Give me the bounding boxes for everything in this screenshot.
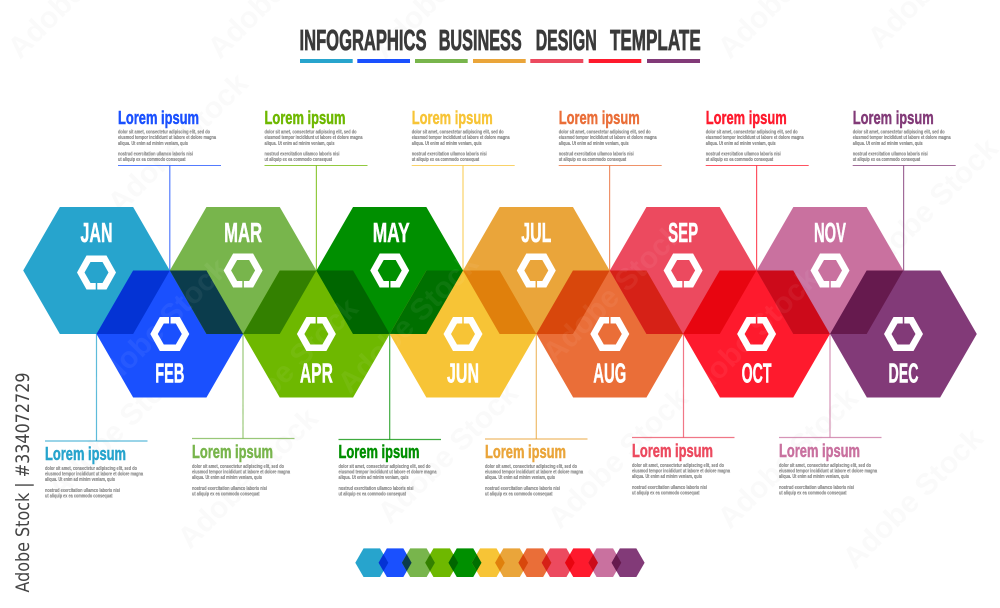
hexagon: JUL: JUL — [521, 217, 551, 248]
text block: JAN: Lorem ipsum — [45, 444, 126, 464]
text block: AUG: ut aliquip ex ea commodo consequat — [559, 157, 626, 163]
title: DESIGN — [536, 25, 597, 57]
text block: FEB — [118, 108, 221, 166]
hexagon: FEB — [96, 270, 243, 398]
connector: APR — [315, 166, 317, 270]
text: Adobe Stock — [82, 252, 235, 405]
text block: SEP: eiusmod tempor incididunt ut labore et dolore magna — [632, 468, 731, 474]
text block: AUG: nostrud exercitation ullamco laboris nisi — [559, 152, 634, 158]
text block: MAR: Lorem ipsum — [192, 442, 273, 462]
text block: SEP: Lorem ipsum — [632, 441, 713, 461]
title: INFOGRAPHICS — [300, 25, 426, 57]
text block: SEP: ut aliquip ex ea commodo consequat — [632, 490, 700, 496]
text block: AUG: dolor sit amet, consectetur adipiscing elit, sed do — [559, 130, 651, 136]
hexagon: JAN: JAN — [80, 217, 112, 248]
text: Adobe Stock — [672, 262, 825, 415]
text block: NOV: aliqua. Ut enim ad minim veniam, quis — [779, 474, 849, 480]
text block: JAN: eiusmod tempor incididunt ut labore et dolore magna — [45, 472, 144, 478]
connector: JUN — [462, 166, 464, 270]
text block: OCT: nostrud exercitation ullamco laboris nisi — [706, 152, 781, 158]
text: Adobe Stock — [837, 422, 990, 575]
text block: OCT: eiusmod tempor incididunt ut labore et dolore magna — [706, 135, 804, 141]
text block: JUL: Lorem ipsum — [485, 442, 566, 462]
connector: DEC — [903, 166, 905, 270]
text block: APR: nostrud exercitation ullamco laboris nisi — [264, 152, 340, 158]
text: Adobe Stock — [212, 292, 365, 445]
connector: NOV — [829, 334, 831, 438]
title — [300, 25, 701, 57]
text block: MAR: nostrud exercitation ullamco laboris nisi — [192, 486, 267, 492]
hexagon: SEP — [610, 207, 756, 334]
connector: AUG — [609, 166, 611, 270]
text block: JUL — [485, 439, 588, 498]
text block: JAN: aliqua. Ut enim ad minim veniam, quis — [45, 477, 115, 483]
text block: JAN: nostrud exercitation ullamco laboris nisi — [45, 488, 120, 494]
text block: APR: dolor sit amet, consectetur adipiscing elit, sed do — [264, 130, 357, 136]
text block: DEC: eiusmod tempor incididunt ut labore et dolore magna — [853, 135, 951, 141]
text block: APR: aliqua. Ut enim ad minim veniam, quis — [264, 141, 334, 147]
connector: MAR — [242, 334, 244, 438]
hexagon: APR — [243, 270, 390, 398]
text: Adobe Stock — [712, 382, 865, 535]
text block: JAN: dolor sit amet, consectetur adipiscing elit, sed do — [45, 466, 138, 472]
text block: OCT: aliqua. Ut enim ad minim veniam, quis — [706, 141, 776, 147]
text block: JAN: ut aliquip ex ea commodo consequat — [45, 494, 113, 500]
text block: OCT: dolor sit amet, consectetur adipiscing elit, sed do — [706, 130, 798, 136]
text block: MAY: nostrud exercitation ullamco laboris nisi — [338, 486, 414, 492]
hexagon: MAR — [170, 207, 316, 334]
text block: FEB: Lorem ipsum — [118, 108, 199, 128]
title: BUSINESS — [439, 25, 522, 57]
text block: MAY: ut aliquip ex ea commodo consequat — [338, 492, 406, 498]
hexagon: SEP: SEP — [668, 217, 698, 248]
hexagon: JAN — [23, 207, 170, 334]
text block: JUN: ut aliquip ex ea commodo consequat — [412, 157, 479, 163]
text block: NOV — [779, 438, 882, 496]
text block: DEC: nostrud exercitation ullamco laboris nisi — [853, 152, 928, 158]
text block: JUL: aliqua. Ut enim ad minim veniam, quis — [485, 475, 555, 481]
hexagon: MAR: MAR — [224, 217, 262, 248]
text block: FEB: aliqua. Ut enim ad minim veniam, quis — [118, 141, 188, 147]
text block: AUG — [559, 108, 662, 166]
title: TEMPLATE — [610, 25, 701, 57]
text block: OCT: Lorem ipsum — [706, 108, 787, 128]
text block: JUN: Lorem ipsum — [412, 108, 493, 128]
text: Adobe Stock — [102, 67, 255, 220]
text block: APR: Lorem ipsum — [264, 108, 346, 128]
hexagon: OCT: OCT — [742, 357, 772, 388]
connector: JUL — [535, 334, 537, 439]
text block: AUG: eiusmod tempor incididunt ut labore et dolore magna — [559, 135, 657, 141]
text block: SEP: dolor sit amet, consectetur adipiscing elit, sed do — [632, 463, 725, 469]
text: Adobe Stock — [372, 377, 525, 530]
text block: JAN — [45, 441, 148, 500]
text block: DEC — [853, 108, 956, 166]
hexagon: NOV — [757, 207, 903, 334]
stock id side label: Adobe Stock | #334072729 — [12, 372, 34, 592]
hexagon: DEC — [830, 270, 977, 398]
text block: MAY: aliqua. Ut enim ad minim veniam, quis — [338, 475, 408, 481]
text block: APR: eiusmod tempor incididunt ut labore et dolore magna — [264, 135, 363, 141]
text: Adobe Stock — [542, 382, 695, 535]
connector: FEB — [169, 166, 171, 270]
text block: OCT: ut aliquip ex ea commodo consequat — [706, 157, 773, 163]
hexagon: OCT — [683, 270, 830, 398]
text block: MAR: dolor sit amet, consectetur adipiscing elit, sed do — [192, 464, 285, 470]
hexagon: JUL — [463, 207, 610, 334]
hexagon: DEC: DEC — [888, 357, 919, 388]
text block: FEB: dolor sit amet, consectetur adipiscing elit, sed do — [118, 130, 211, 136]
text block: JUN — [412, 108, 515, 166]
text block: SEP — [632, 438, 734, 496]
hexagon: JUN: JUN — [447, 357, 479, 388]
text block: JUN: dolor sit amet, consectetur adipiscing elit, sed do — [412, 130, 504, 136]
text block: MAY — [338, 440, 441, 498]
hexagon: FEB: FEB — [155, 357, 184, 388]
text block: NOV: nostrud exercitation ullamco laboris nisi — [779, 485, 854, 491]
title colour bars — [300, 59, 700, 63]
text block: SEP: aliqua. Ut enim ad minim veniam, quis — [632, 474, 702, 480]
hexagon: NOV: NOV — [814, 217, 846, 248]
connector: MAY — [389, 334, 391, 440]
hexagon: JUN — [390, 270, 536, 398]
text block: DEC: Lorem ipsum — [853, 108, 934, 128]
text block: MAY: dolor sit amet, consectetur adipiscing elit, sed do — [338, 464, 431, 470]
text block: FEB: eiusmod tempor incididunt ut labore et dolore magna — [118, 135, 217, 141]
text block: JUL: dolor sit amet, consectetur adipiscing elit, sed do — [485, 464, 578, 470]
text block: NOV: ut aliquip ex ea commodo consequat — [779, 490, 847, 496]
text block: JUN: aliqua. Ut enim ad minim veniam, quis — [412, 141, 482, 147]
text block: JUL: eiusmod tempor incididunt ut labore et dolore magna — [485, 470, 584, 476]
hexagon: AUG — [536, 270, 683, 398]
text block: MAR — [192, 438, 294, 498]
hexagon overlaps — [96, 270, 903, 334]
text block: NOV: eiusmod tempor incididunt ut labore et dolore magna — [779, 468, 878, 474]
text block: SEP: nostrud exercitation ullamco laboris nisi — [632, 485, 707, 491]
hexagon: MAY — [316, 207, 463, 334]
text block: MAY: eiusmod tempor incididunt ut labore et dolore magna — [338, 470, 437, 476]
hexagon: MAY: MAY — [373, 217, 410, 248]
text block: APR: ut aliquip ex ea commodo consequat — [264, 157, 332, 163]
connector: SEP — [682, 334, 684, 438]
text block: JUL: nostrud exercitation ullamco laboris nisi — [485, 486, 560, 492]
text block: JUN: nostrud exercitation ullamco laboris nisi — [412, 152, 487, 158]
text block: MAR: aliqua. Ut enim ad minim veniam, quis — [192, 475, 262, 481]
hexagon: AUG: AUG — [593, 357, 626, 388]
connector: OCT — [756, 166, 758, 270]
text block: APR — [264, 108, 368, 166]
text: Adobe Stock — [537, 217, 690, 370]
text block: MAY: Lorem ipsum — [338, 442, 420, 462]
text block: JUN: eiusmod tempor incididunt ut labore et dolore magna — [412, 135, 510, 141]
text block: AUG: aliqua. Ut enim ad minim veniam, quis — [559, 141, 629, 147]
text block: AUG: Lorem ipsum — [559, 108, 640, 128]
text block: FEB: ut aliquip ex ea commodo consequat — [118, 157, 186, 163]
text: Adobe Stock — [332, 247, 485, 400]
text block: MAR: eiusmod tempor incididunt ut labore et dolore magna — [192, 470, 291, 476]
text block: DEC: aliqua. Ut enim ad minim veniam, quis — [853, 141, 923, 147]
text block: OCT — [706, 108, 809, 166]
text: Adobe Stock — [42, 352, 195, 505]
text block: FEB: nostrud exercitation ullamco laboris nisi — [118, 152, 193, 158]
text: Adobe Stock — [172, 402, 325, 555]
text block: DEC: ut aliquip ex ea commodo consequat — [853, 157, 920, 163]
connector: JAN — [96, 334, 98, 441]
text block: NOV: dolor sit amet, consectetur adipiscing elit, sed do — [779, 463, 872, 469]
hexagon: APR: APR — [300, 357, 333, 388]
text block: MAR: ut aliquip ex ea commodo consequat — [192, 492, 260, 498]
text block: JUL: ut aliquip ex ea commodo consequat — [485, 492, 553, 498]
text block: DEC: dolor sit amet, consectetur adipiscing elit, sed do — [853, 130, 945, 136]
mini hexagon strip — [355, 548, 645, 577]
text block: NOV: Lorem ipsum — [779, 441, 860, 461]
